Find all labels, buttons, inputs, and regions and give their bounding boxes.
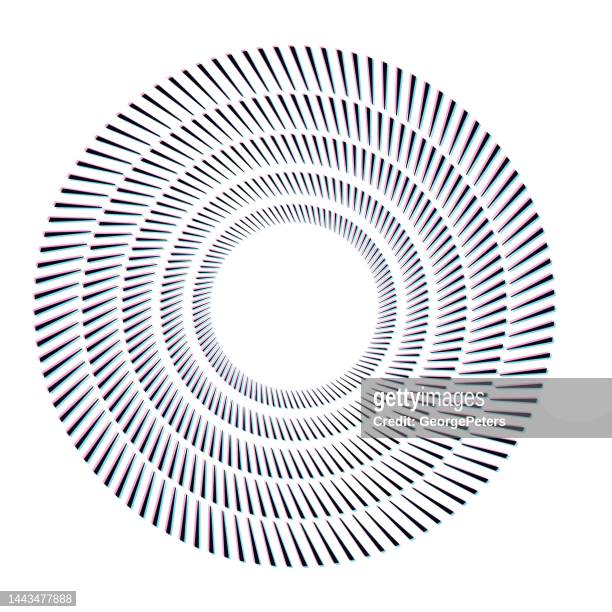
stock id tag bbox=[0, 591, 76, 606]
id number: 1443477888 bbox=[8, 592, 72, 606]
watermark background bbox=[361, 378, 612, 438]
ring 5: innermost wedges bbox=[180, 201, 409, 419]
ring 2: wedges bbox=[57, 88, 532, 539]
watermark band bbox=[361, 370, 612, 438]
id background bbox=[0, 591, 76, 606]
ring 3: wedges bbox=[102, 129, 487, 496]
ring 4: wedges bbox=[144, 168, 445, 454]
credit line: Credit: GeorgePeters bbox=[373, 414, 506, 429]
watermark swirl texture bbox=[540, 370, 612, 422]
getty logo wordmark: gettyimages bbox=[373, 382, 485, 412]
